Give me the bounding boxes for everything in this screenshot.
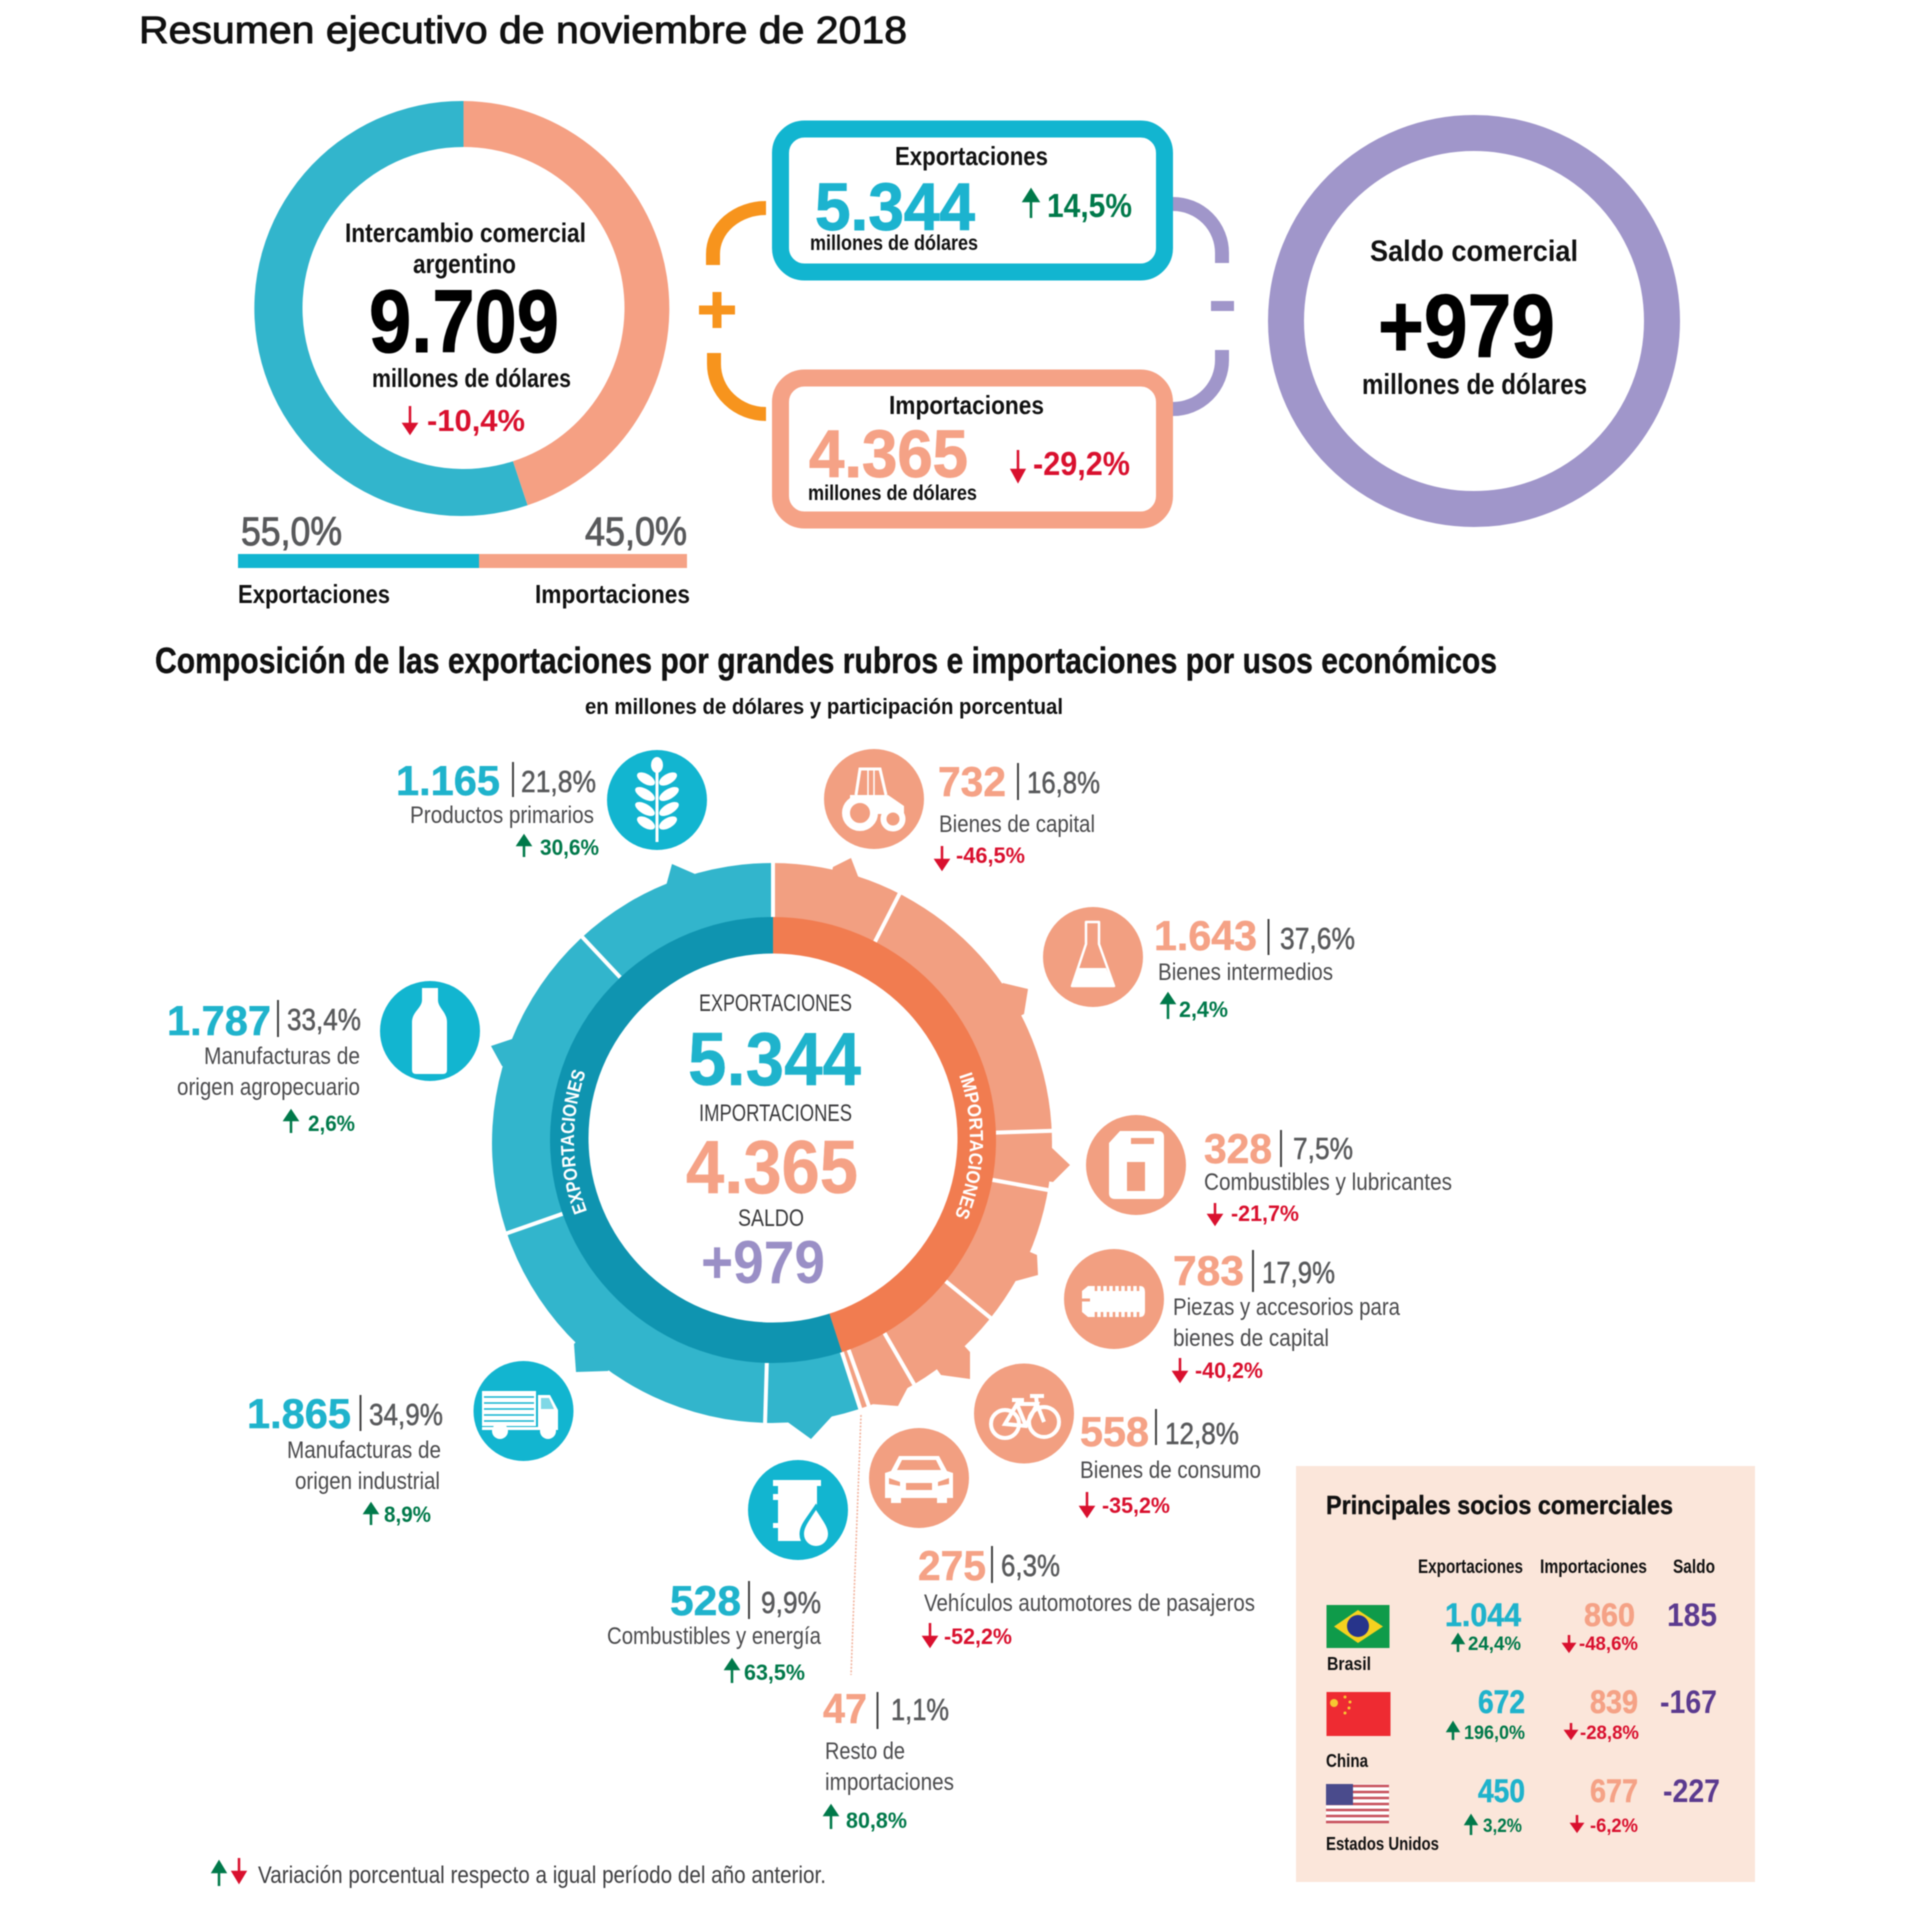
panel: importaciones box: Importaciones bbox=[889, 390, 1044, 420]
item: manufacturas de origen agropecuario: 1.787 bbox=[167, 997, 271, 1044]
icon: tractor bbox=[824, 749, 924, 849]
connector: minus bracket bbox=[1173, 204, 1234, 409]
item: vehículos automotores: Vehículos automotores de pasajeros bbox=[924, 1590, 1255, 1617]
panel: saldo comercial ring: millones de dólares bbox=[1362, 369, 1587, 401]
centre totals: SALDO bbox=[738, 1205, 804, 1232]
item: bienes de consumo: Bienes de consumo bbox=[1080, 1457, 1261, 1484]
item: manufacturas de origen industrial: origen industrial bbox=[295, 1468, 440, 1495]
row: Brasil: 1.044 bbox=[1445, 1597, 1521, 1633]
variation: -10,4% bbox=[427, 403, 525, 438]
share bar with percentages: 45,0% bbox=[585, 510, 687, 554]
row: China: -167 bbox=[1660, 1684, 1717, 1720]
item: productos primarios: 21,8% bbox=[521, 764, 596, 799]
item: bienes intermedios: 1.643 bbox=[1154, 912, 1257, 959]
item: piezas y accesorios: bienes de capital bbox=[1173, 1325, 1329, 1352]
item: vehículos automotores: -52,2% bbox=[944, 1624, 1012, 1649]
row: Brasil bbox=[1326, 1597, 1717, 1674]
panel: intercambio comercial donut bbox=[254, 101, 669, 516]
donut heading bbox=[345, 218, 586, 279]
item: combustibles y energía: 528 bbox=[670, 1577, 741, 1624]
panel: exportaciones box: 5.344 bbox=[815, 170, 975, 245]
share bar with percentages: Exportaciones bbox=[238, 579, 390, 609]
item: manufacturas de origen industrial: 8,9% bbox=[384, 1502, 431, 1527]
panel: exportaciones box: Exportaciones bbox=[895, 141, 1048, 171]
column headers: Saldo bbox=[1673, 1557, 1715, 1578]
item: combustibles y energía bbox=[607, 1460, 848, 1685]
item: productos primarios: 30,6% bbox=[540, 835, 599, 860]
item: bienes de capital: Bienes de capital bbox=[939, 811, 1095, 838]
panel: saldo comercial ring: +979 bbox=[1378, 277, 1555, 377]
panel: exportaciones box bbox=[780, 129, 1164, 272]
outer ring: exportaciones bbox=[492, 863, 858, 1423]
chart: composition ring bbox=[490, 858, 1070, 1440]
item: resto de importaciones: importaciones bbox=[825, 1769, 954, 1796]
item: manufacturas de origen agropecuario: 33,4% bbox=[287, 1002, 361, 1037]
centre totals: +979 bbox=[701, 1229, 825, 1296]
item: manufacturas de origen agropecuario bbox=[167, 981, 480, 1136]
icon: car bbox=[869, 1428, 969, 1528]
row: Brasil: 185 bbox=[1667, 1597, 1717, 1633]
donut: importaciones share bbox=[464, 101, 669, 505]
icon: flag of USA bbox=[1326, 1784, 1389, 1823]
icon: flag of Brazil bbox=[1326, 1605, 1390, 1648]
row: Estados Unidos: Estados Unidos bbox=[1326, 1833, 1439, 1854]
item: piezas y accesorios bbox=[1064, 1247, 1401, 1383]
donut heading: Intercambio comercial bbox=[345, 218, 586, 248]
item: productos primarios bbox=[396, 750, 707, 860]
row: China: -28,8% bbox=[1580, 1722, 1639, 1744]
centre totals: IMPORTACIONES bbox=[699, 1100, 852, 1127]
icon: bottle bbox=[380, 981, 480, 1081]
centre totals: 4.365 bbox=[686, 1125, 858, 1209]
leader line: resto de importaciones bbox=[851, 1415, 861, 1675]
centre totals bbox=[686, 990, 861, 1296]
item: manufacturas de origen industrial: 1.865 bbox=[247, 1390, 351, 1437]
row: Brasil: -48,6% bbox=[1579, 1633, 1638, 1655]
row: Brasil: 860 bbox=[1584, 1597, 1635, 1633]
icon: wheat bbox=[607, 750, 707, 850]
row: Estados Unidos: -227 bbox=[1663, 1773, 1720, 1809]
heading: composición: Composición de las exportaciones por grandes rubros e importaciones por usos económicos bbox=[155, 640, 1497, 681]
row: China: 672 bbox=[1478, 1684, 1525, 1720]
icon: barrel and drop bbox=[748, 1460, 848, 1560]
row: Brasil: Brasil bbox=[1327, 1653, 1371, 1674]
item: bienes intermedios: Bienes intermedios bbox=[1158, 959, 1333, 986]
item: bienes de consumo: 12,8% bbox=[1165, 1416, 1239, 1451]
item: bienes de consumo: -35,2% bbox=[1102, 1493, 1170, 1518]
row: China: 196,0% bbox=[1464, 1722, 1525, 1744]
panel: importaciones box: -29,2% bbox=[1033, 445, 1130, 482]
item: bienes de capital: 16,8% bbox=[1027, 765, 1100, 800]
donut: exportaciones share bbox=[254, 101, 528, 516]
item: manufacturas de origen agropecuario: 2,6% bbox=[308, 1111, 355, 1136]
item: productos primarios: Productos primarios bbox=[410, 802, 594, 829]
row: Estados Unidos: -6,2% bbox=[1590, 1815, 1638, 1837]
row: Brasil: 24,4% bbox=[1468, 1633, 1521, 1655]
ring label: importaciones: IMPORTACIONES bbox=[955, 1072, 984, 1220]
item: combustibles y lubricantes: 7,5% bbox=[1293, 1131, 1353, 1166]
row: China bbox=[1326, 1684, 1717, 1771]
panel heading: Principales socios comerciales bbox=[1326, 1490, 1673, 1520]
row: China: China bbox=[1326, 1750, 1369, 1771]
item: bienes intermedios bbox=[1043, 907, 1355, 1022]
item: manufacturas de origen industrial: Manufacturas de bbox=[287, 1437, 441, 1464]
panel: importaciones box: 4.365 bbox=[809, 417, 968, 492]
item: combustibles y energía: Combustibles y energía bbox=[607, 1623, 822, 1650]
item: bienes intermedios: 37,6% bbox=[1280, 921, 1355, 956]
panel: saldo comercial ring: Saldo comercial bbox=[1370, 235, 1578, 268]
item: piezas y accesorios: 783 bbox=[1173, 1247, 1244, 1294]
icon: flask bbox=[1043, 907, 1143, 1007]
item: bienes de consumo: 558 bbox=[1080, 1408, 1149, 1455]
panel: exportaciones box: 14,5% bbox=[1047, 187, 1132, 224]
icon: truck bbox=[474, 1361, 574, 1461]
icon: jerry can bbox=[1086, 1115, 1186, 1215]
icon: flag of China bbox=[1326, 1692, 1390, 1736]
row: Estados Unidos: 677 bbox=[1590, 1773, 1638, 1809]
inner ring: importaciones bbox=[773, 917, 996, 1352]
connector: plus bracket bbox=[699, 208, 766, 414]
row: Estados Unidos: 3,2% bbox=[1483, 1815, 1522, 1837]
item: piezas y accesorios: Piezas y accesorios para bbox=[1173, 1294, 1401, 1321]
icon: engine part bbox=[1064, 1249, 1164, 1349]
centre totals: 5.344 bbox=[688, 1017, 861, 1101]
panel: importaciones box: millones de dólares bbox=[808, 482, 977, 505]
donut heading: argentino bbox=[413, 249, 516, 279]
item: combustibles y lubricantes: -21,7% bbox=[1231, 1201, 1299, 1226]
teeth: importaciones bbox=[773, 858, 1070, 1406]
item: piezas y accesorios: 17,9% bbox=[1262, 1255, 1335, 1290]
icon: bicycle bbox=[974, 1364, 1074, 1464]
row: Estados Unidos: 450 bbox=[1478, 1773, 1525, 1809]
item: piezas y accesorios: -40,2% bbox=[1195, 1358, 1263, 1383]
item: bienes intermedios: 2,4% bbox=[1179, 997, 1228, 1022]
row: China: 839 bbox=[1590, 1684, 1638, 1720]
outer ring: importaciones bbox=[772, 863, 1052, 1409]
share bar with percentages bbox=[238, 510, 690, 609]
inner ring: exportaciones bbox=[550, 917, 842, 1363]
item: vehículos automotores: 275 bbox=[918, 1542, 986, 1589]
centre totals: EXPORTACIONES bbox=[699, 990, 852, 1017]
item: resto de importaciones bbox=[823, 1685, 954, 1833]
unit: millones de dólares bbox=[372, 363, 571, 393]
item: bienes de consumo bbox=[974, 1364, 1261, 1518]
item: manufacturas de origen industrial bbox=[247, 1361, 574, 1527]
teeth: exportaciones bbox=[491, 864, 834, 1439]
panel: exportaciones box: millones de dólares bbox=[810, 232, 978, 255]
item: resto de importaciones: Resto de bbox=[825, 1738, 905, 1765]
item: manufacturas de origen industrial: 34,9% bbox=[369, 1397, 443, 1432]
column headers bbox=[1418, 1557, 1715, 1578]
item: bienes de capital: 732 bbox=[938, 758, 1006, 805]
item: vehículos automotores bbox=[869, 1428, 1255, 1649]
item: manufacturas de origen agropecuario: origen agropecuario bbox=[177, 1074, 360, 1101]
item: bienes de capital: -46,5% bbox=[956, 843, 1025, 868]
item: resto de importaciones: 80,8% bbox=[846, 1808, 907, 1833]
item: combustibles y energía: 63,5% bbox=[744, 1660, 805, 1685]
share bar with percentages: 55,0% bbox=[241, 510, 342, 554]
panel: saldo comercial ring bbox=[1286, 133, 1662, 509]
item: combustibles y lubricantes: 328 bbox=[1204, 1125, 1272, 1172]
centre hole bbox=[588, 954, 958, 1322]
segment separators bbox=[504, 855, 1058, 1425]
item: vehículos automotores: 6,3% bbox=[1001, 1548, 1060, 1583]
item: resto de importaciones: 1,1% bbox=[891, 1692, 949, 1727]
column headers: Importaciones bbox=[1540, 1557, 1647, 1578]
row: Estados Unidos bbox=[1326, 1773, 1720, 1854]
panel: principales socios comerciales bbox=[1296, 1466, 1755, 1882]
item: combustibles y lubricantes bbox=[1086, 1115, 1452, 1226]
column headers: Exportaciones bbox=[1418, 1557, 1523, 1578]
item: productos primarios: 1.165 bbox=[396, 757, 500, 804]
share bar with percentages: Importaciones bbox=[535, 579, 690, 609]
item: resto de importaciones: 47 bbox=[823, 1685, 867, 1732]
item: combustibles y energía: 9,9% bbox=[761, 1585, 821, 1620]
title: Resumen ejecutivo de noviembre de 2018 bbox=[139, 10, 907, 52]
subheading: en millones de dólares y participación porcentual bbox=[585, 694, 1063, 719]
item: combustibles y lubricantes: Combustibles y lubricantes bbox=[1204, 1169, 1452, 1196]
total value: 9.709 bbox=[369, 271, 559, 371]
footnote: Variación porcentual respecto a igual período del año anterior. bbox=[258, 1862, 826, 1889]
panel: importaciones box bbox=[780, 378, 1164, 520]
item: bienes de capital bbox=[824, 749, 1100, 869]
item: manufacturas de origen agropecuario: Manufacturas de bbox=[204, 1043, 360, 1070]
ring label: exportaciones: EXPORTACIONES bbox=[560, 1069, 588, 1216]
